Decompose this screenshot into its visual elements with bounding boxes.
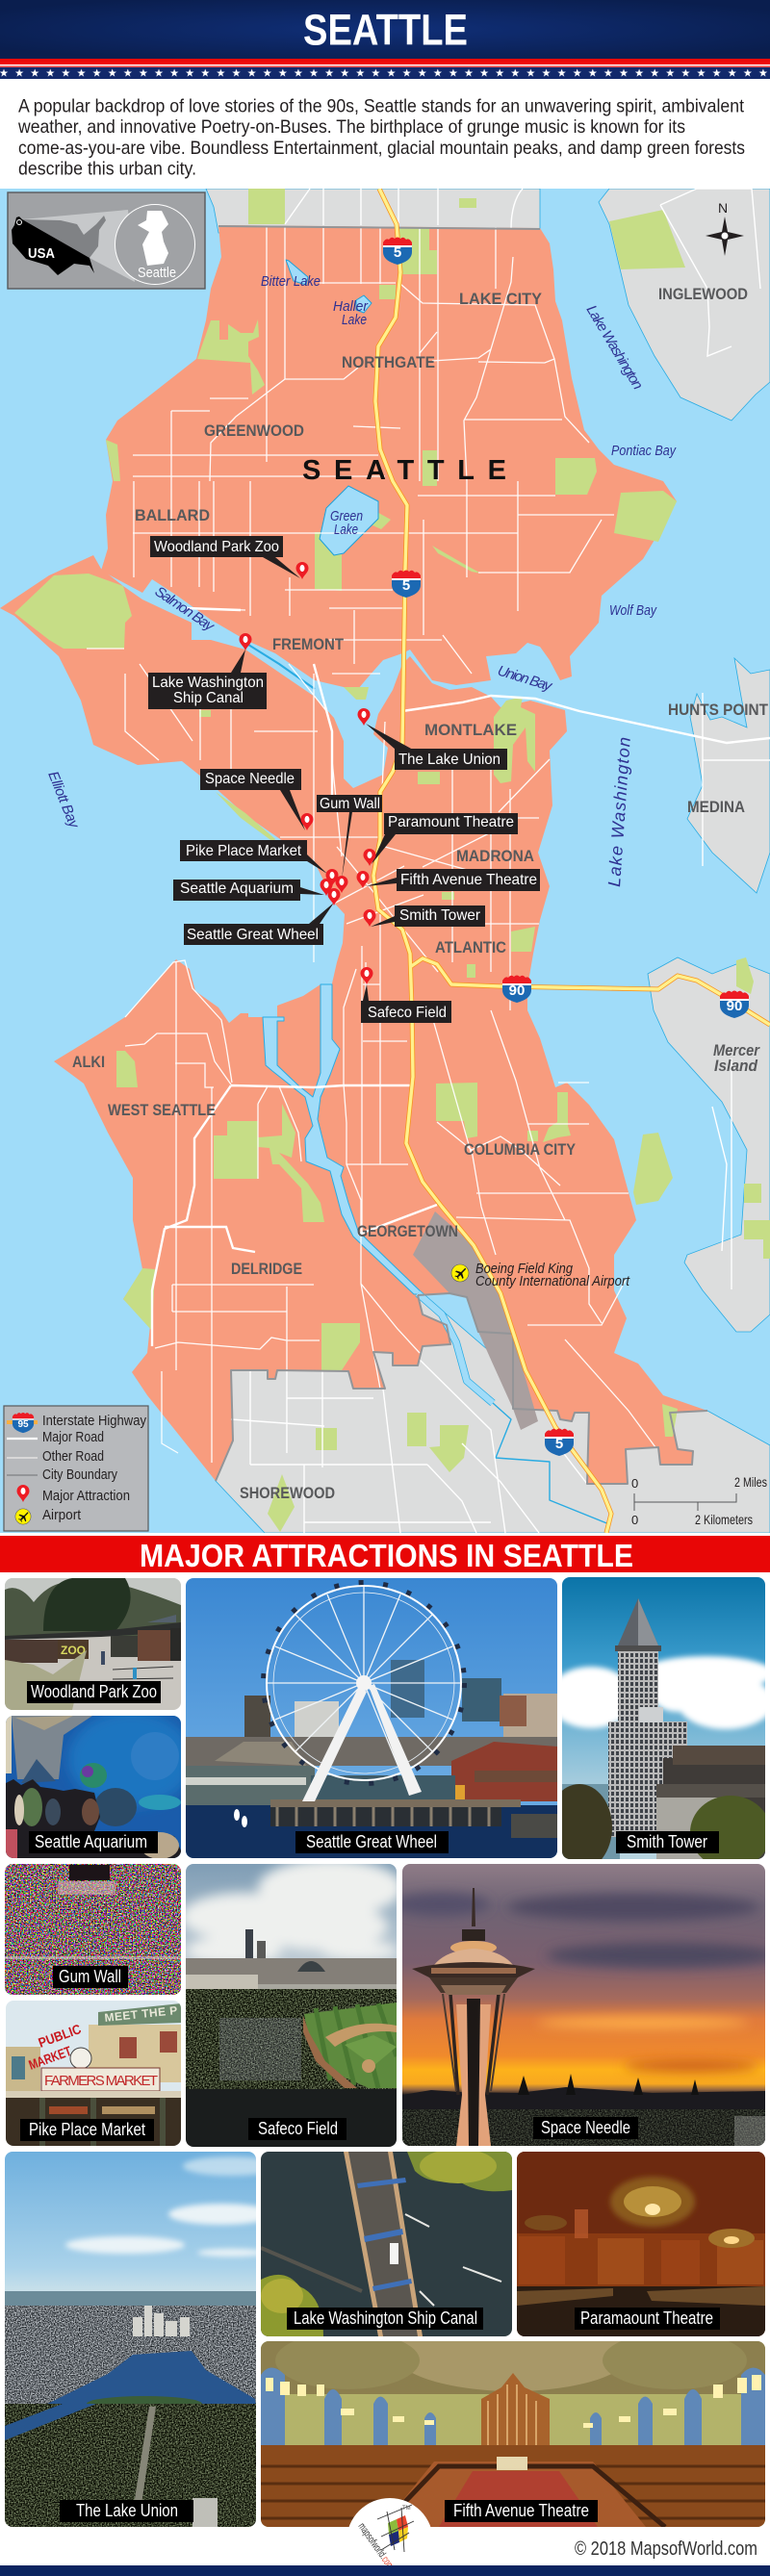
- water labels: Salmon Bay: [152, 583, 218, 635]
- I-90 shield east: 90: [727, 998, 742, 1014]
- I-90 shield: [502, 976, 531, 1003]
- caption: Gum Wall: [59, 1967, 121, 1986]
- scale bar: 0: [631, 1476, 638, 1491]
- callout: Space Needle: Space Needle: [205, 771, 295, 787]
- callout: Seattle Great Wheel: [184, 903, 334, 945]
- callout: Lake Washington Ship Canal: Lake Washington: [152, 675, 264, 691]
- water labels: Pontiac Bay: [611, 443, 677, 459]
- callout: Paramount Theatre: Paramount Theatre: [388, 814, 514, 830]
- photo: Safeco Field: [181, 1859, 402, 2147]
- waterways and lakes: [245, 260, 609, 1524]
- water labels: Bitter Lake: [261, 273, 321, 290]
- legend: City Boundary: [42, 1467, 117, 1483]
- water labels: Lake: [342, 312, 367, 328]
- other roads (grey land): [231, 189, 770, 1533]
- neighbourhood labels: Mercer: [713, 1041, 760, 1059]
- inset locator: USA and Seattle: [8, 192, 205, 289]
- water labels: [44, 273, 677, 887]
- neighbourhood labels: LAKE CITY: [459, 290, 543, 308]
- I-5 shield north: [383, 237, 412, 265]
- compass: [706, 200, 744, 256]
- neighbourhood labels: SHOREWOOD: [240, 1484, 335, 1502]
- I-5 shield central: 5: [402, 577, 410, 594]
- neighbourhood labels: MONTLAKE: [424, 721, 517, 739]
- water labels: Wolf Bay: [609, 602, 657, 619]
- callout: Lake Washington Ship Canal: [148, 633, 267, 709]
- major and minor city roads: [87, 227, 655, 1463]
- callout: Smith Tower: [364, 905, 485, 927]
- photo: The Lake Union: [5, 2152, 279, 2527]
- callout: Seattle Aquarium: Seattle Aquarium: [180, 880, 294, 897]
- surrounding land: [206, 189, 770, 1533]
- callout: The Lake Union: The Lake Union: [398, 752, 500, 768]
- caption: Smith Tower: [627, 1832, 707, 1851]
- neighbourhood labels: [72, 285, 769, 1502]
- caption: Space Needle: [541, 2118, 630, 2137]
- buildings: [391, 1660, 424, 1718]
- callout: Seattle Aquarium: [173, 880, 324, 901]
- legend: Interstate Highway: [42, 1413, 146, 1429]
- photo: Gum Wall: [5, 1864, 181, 1995]
- caption: Fifth Avenue Theatre: [453, 2501, 589, 2520]
- callout: Woodland Park Zoo: [150, 536, 308, 579]
- legend: Major Attraction: [42, 1488, 130, 1504]
- Boeing Field airport grounds: [413, 1211, 538, 1430]
- neighbourhood labels: ATLANTIC: [435, 938, 506, 956]
- caption: Pike Place Market: [29, 2120, 145, 2139]
- legend: Airport: [42, 1507, 82, 1523]
- callout: Fifth Avenue Theatre: [356, 869, 540, 891]
- airport marker: [451, 1261, 630, 1289]
- title: SEATTLE: [303, 6, 468, 54]
- neighbourhood labels: DELRIDGE: [231, 1260, 302, 1278]
- logo: MapsofWorld: [346, 2498, 433, 2576]
- photo: Pike Place Market: [6, 2001, 181, 2146]
- neighbourhood labels: COLUMBIA CITY: [464, 1140, 577, 1159]
- callout: Lake Washington Ship Canal: Ship Canal: [173, 690, 244, 706]
- I-90 shield east: [720, 991, 749, 1018]
- photo: Pike Place Market: MARKET: [27, 2043, 74, 2073]
- compass: N: [718, 200, 728, 216]
- callout: Seattle Great Wheel: Seattle Great Wheel: [187, 927, 319, 943]
- intro paragraph: describe this urban city.: [18, 158, 196, 179]
- legend: [4, 1406, 148, 1531]
- I-5 shield central: [392, 570, 421, 598]
- neighbourhood labels: INGLEWOOD: [658, 285, 748, 303]
- callout: Pike Place Market: Pike Place Market: [186, 843, 302, 859]
- neighbourhood labels: WEST SEATTLE: [108, 1101, 216, 1119]
- highways: [373, 189, 770, 1533]
- caption: Seattle Aquarium: [35, 1832, 147, 1851]
- legend: 95: [17, 1419, 29, 1430]
- city boundary lines: [216, 226, 707, 1484]
- caption: Paramaount Theatre: [580, 2308, 713, 2328]
- water labels: Union Bay: [496, 663, 555, 695]
- callout: The Lake Union: [358, 708, 507, 770]
- water labels: Elliott Bay: [44, 769, 83, 831]
- water labels: Lake Washington: [604, 736, 634, 887]
- water labels: Lake: [334, 522, 358, 538]
- city land: [0, 225, 707, 1484]
- photo: Pike Place Market: FARMERS MARKET: [44, 2073, 158, 2089]
- city name label: SEATTLE: [302, 455, 506, 486]
- intro paragraph: weather, and innovative Poetry-on-Buses. The birthplace of grunge music is known for its: [17, 116, 685, 138]
- I-5 shield south: [545, 1428, 574, 1456]
- neighbourhood labels: GREENWOOD: [204, 421, 304, 440]
- inset locator: USA and Seattle: USA: [28, 245, 55, 262]
- I-5 shield south: 5: [555, 1436, 563, 1452]
- photo: Paramount Theatre: [517, 2152, 765, 2336]
- scale bar: 0: [631, 1513, 638, 1527]
- airport marker: Boeing Field King: [475, 1261, 574, 1277]
- footer bar: [0, 2565, 770, 2576]
- photo: Seattle Great Wheel: [186, 1578, 557, 1858]
- parks: [14, 189, 770, 1532]
- inset locator: USA and Seattle: Seattle: [138, 265, 176, 281]
- photo: Woodland Park Zoo: [5, 1578, 181, 1710]
- I-90 shield: 90: [509, 982, 525, 999]
- water labels: Haller: [333, 298, 369, 315]
- scale bar: [631, 1477, 767, 1524]
- callout: Gum Wall: Gum Wall: [320, 796, 380, 812]
- callout: Gum Wall: [317, 795, 382, 880]
- pins: waterfront cluster: [320, 869, 348, 905]
- legend: Other Road: [42, 1448, 104, 1465]
- callout: Smith Tower: Smith Tower: [399, 907, 481, 924]
- airport marker: County International Airport: [475, 1273, 630, 1289]
- logo: MapsofWorld: TM: [402, 2506, 411, 2512]
- caption: Woodland Park Zoo: [31, 1682, 157, 1701]
- photo: Pike Place Market: PUBLIC: [37, 2021, 83, 2051]
- callout: Fifth Avenue Theatre: Fifth Avenue Theatre: [400, 872, 537, 888]
- attraction callouts: [148, 536, 540, 1023]
- photo: Lake Washington Ship Canal: [261, 2149, 512, 2336]
- caption: Lake Washington Ship Canal: [294, 2308, 477, 2328]
- photo: Pike Place Market: MEET THE P: [104, 2003, 178, 2025]
- section heading: major attractions: MAJOR ATTRACTIONS IN SEATTLE: [140, 1538, 633, 1573]
- callout: Woodland Park Zoo: Woodland Park Zoo: [154, 539, 279, 555]
- header banner: [0, 0, 770, 79]
- caption: The Lake Union: [76, 2501, 178, 2520]
- callout: Space Needle: [200, 769, 314, 830]
- section heading: major attractions: [0, 1536, 770, 1573]
- I-5 shield north: 5: [394, 244, 401, 261]
- photo: Seattle Aquarium: [6, 1711, 193, 1859]
- photo: Space Needle: [393, 1864, 770, 2146]
- scale bar: 2 Kilometers: [695, 1512, 753, 1527]
- neighbourhood labels: NORTHGATE: [342, 353, 435, 371]
- neighbourhood labels: Island: [714, 1057, 758, 1075]
- photo: Smith Tower: [547, 1577, 770, 1871]
- caption: Seattle Great Wheel: [306, 1832, 437, 1851]
- map of Seattle: [0, 189, 770, 1533]
- water labels: Lake Washington: [583, 302, 646, 393]
- tower: [472, 1888, 475, 1926]
- callout: Pike Place Market: [180, 840, 327, 874]
- photo: Fifth Avenue Theatre: [261, 2310, 765, 2527]
- neighbourhood labels: GEORGETOWN: [357, 1222, 458, 1240]
- legend: Major Road: [42, 1429, 104, 1445]
- caption: Safeco Field: [258, 2119, 338, 2138]
- photo: Woodland Park Zoo: ZOO: [61, 1644, 86, 1657]
- callout: Safeco Field: Safeco Field: [368, 1005, 447, 1021]
- callout: Safeco Field: [360, 967, 451, 1023]
- callout: Paramount Theatre: [364, 813, 518, 866]
- neighbourhood labels: BALLARD: [135, 506, 210, 524]
- neighbourhood labels: MEDINA: [687, 798, 745, 816]
- neighbourhood labels: ALKI: [72, 1053, 105, 1071]
- water labels: Green: [330, 508, 363, 524]
- neighbourhood labels: MADRONA: [456, 847, 534, 865]
- Ferris wheel: [264, 1583, 464, 1783]
- intro paragraph: [17, 96, 745, 179]
- neighbourhood labels: FREMONT: [272, 635, 345, 653]
